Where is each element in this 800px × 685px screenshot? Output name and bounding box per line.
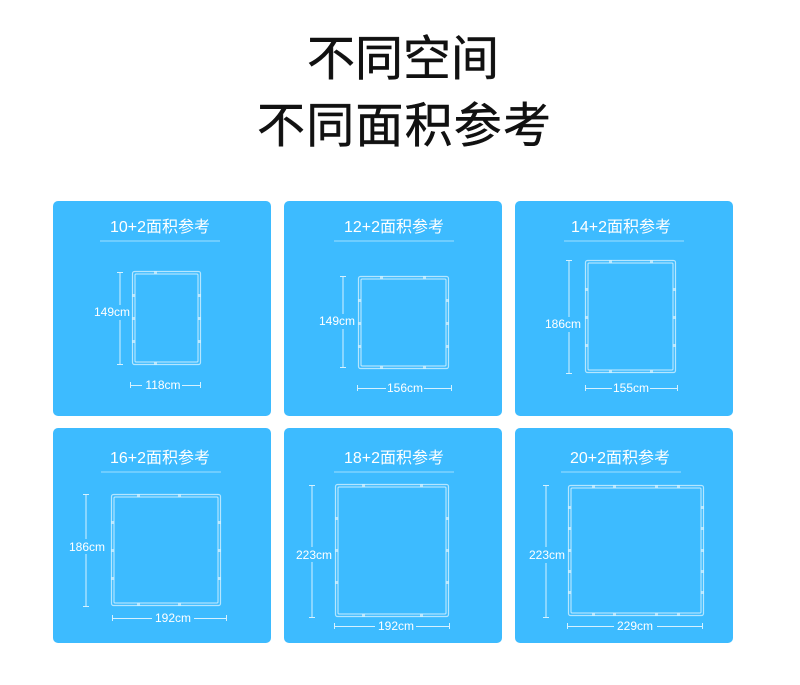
width dimension: 118cm: 118cm xyxy=(145,378,181,392)
width dimension: 229cm: 229cm xyxy=(617,619,653,633)
panel heading: 18+2: 18+2面积参考 xyxy=(344,449,444,467)
height dimension: 223cm: 223cm xyxy=(529,548,565,562)
width dimension: 156cm: 156cm xyxy=(387,381,423,395)
panel: 18+2 xyxy=(284,428,502,643)
panel: 14+2 xyxy=(515,201,733,416)
panel: 20+2 xyxy=(515,428,733,643)
width dimension: 118cm xyxy=(130,378,200,392)
title: line 1: 不同空间 xyxy=(307,33,499,86)
fence outline: 16+2 xyxy=(111,494,221,606)
fence outline: 18+2 xyxy=(335,484,449,617)
height dimension: 149cm: 149cm xyxy=(94,305,130,319)
height dimension: 149cm xyxy=(94,272,130,364)
panel: 12+2 xyxy=(284,201,502,416)
height dimension: 149cm: 149cm xyxy=(319,314,355,328)
width dimension: 192cm xyxy=(112,611,226,625)
height dimension: 186cm: 186cm xyxy=(545,317,581,331)
panel heading: 16+2: 16+2面积参考 xyxy=(110,449,210,467)
fence outline: 12+2 xyxy=(358,276,449,369)
height dimension: 186cm xyxy=(545,260,581,374)
panel heading: 12+2: 12+2面积参考 xyxy=(344,218,444,236)
panel: 10+2 xyxy=(53,201,271,416)
width dimension: 155cm: 155cm xyxy=(613,381,649,395)
fence outline: 14+2 xyxy=(585,260,676,373)
panel heading: 10+2: 10+2面积参考 xyxy=(110,218,210,236)
width dimension: 192cm: 192cm xyxy=(155,611,191,625)
width dimension: 156cm xyxy=(357,381,452,395)
title: line 2: 不同面积参考 xyxy=(257,100,551,153)
panel heading: 14+2: 14+2面积参考 xyxy=(571,218,671,236)
height dimension: 186cm xyxy=(69,494,105,606)
width dimension: 155cm xyxy=(585,381,678,395)
width dimension: 192cm xyxy=(334,619,450,633)
height dimension: 223cm xyxy=(296,486,332,618)
width dimension: 229cm xyxy=(567,619,702,633)
height dimension: 149cm xyxy=(319,276,355,368)
height dimension: 223cm xyxy=(529,486,565,618)
height dimension: 223cm: 223cm xyxy=(296,548,332,562)
fence outline: 10+2 xyxy=(132,271,201,365)
panel heading: 20+2: 20+2面积参考 xyxy=(570,449,670,467)
fence outline: 20+2 xyxy=(568,485,704,616)
width dimension: 192cm: 192cm xyxy=(378,619,414,633)
height dimension: 186cm: 186cm xyxy=(69,540,105,554)
panel: 16+2 xyxy=(53,428,271,643)
